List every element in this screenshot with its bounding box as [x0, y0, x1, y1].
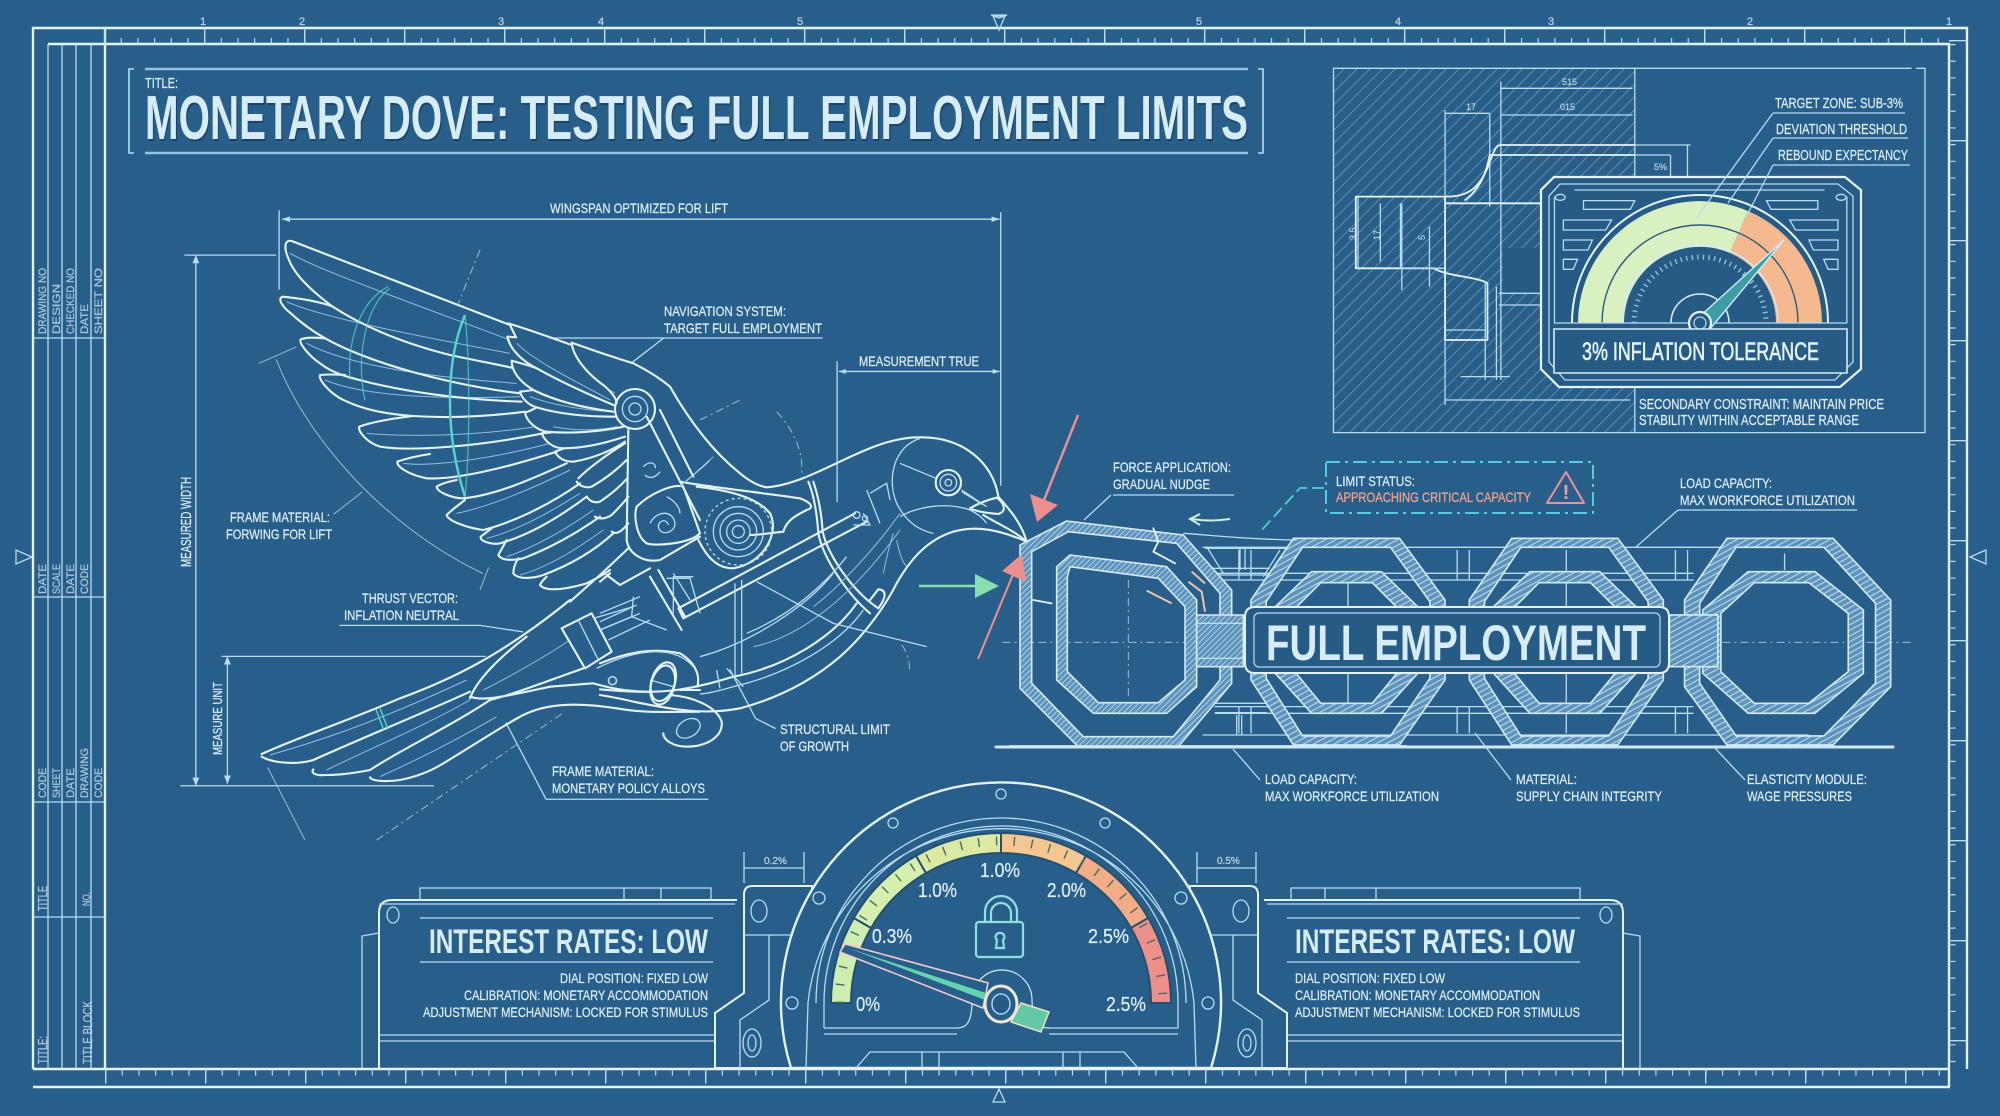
- gauge callouts: [1697, 95, 1910, 217]
- callout: force application: [1084, 459, 1234, 520]
- callout: elasticity: [1714, 747, 1867, 804]
- thrust note: [344, 590, 459, 623]
- hatched drawing: 17: [1466, 102, 1476, 112]
- dial values: 1.0%: [918, 880, 957, 902]
- drawing frame and rulers: 3: [498, 16, 504, 28]
- gauge callouts: TARGET ZONE: SUB-3%: [1775, 95, 1903, 112]
- wing frame note: [226, 509, 332, 542]
- dial side brackets: 0.5%: [1217, 856, 1240, 867]
- callout: elasticity: WAGE PRESSURES: [1747, 788, 1852, 804]
- dove dimension lines: [180, 210, 1001, 840]
- title block side strip: CODE: [93, 768, 105, 798]
- inflation banner: 3% INFLATION TOLERANCE: [1582, 338, 1819, 366]
- right rate heading: INTEREST RATES: LOW: [1295, 923, 1576, 961]
- structural limit note: [780, 721, 890, 754]
- title block side strip: DATE: [37, 564, 49, 594]
- hatched drawing: 5%: [1654, 162, 1667, 172]
- secondary constraint note: STABILITY WITHIN ACCEPTABLE RANGE: [1639, 412, 1859, 429]
- gauge plate: [1541, 177, 1861, 387]
- arrow: small return: [1190, 514, 1230, 525]
- dial values: 0.3%: [872, 926, 912, 948]
- right rate details: DIAL POSITION: FIXED LOW: [1295, 970, 1446, 986]
- callout: load capacity top: LOAD CAPACITY:: [1680, 475, 1772, 491]
- structural limit note: OF GROWTH: [780, 738, 849, 754]
- title small label: TITLE:: [145, 75, 178, 92]
- alloy note: [552, 763, 705, 796]
- dial values: 2.0%: [1047, 880, 1086, 902]
- hatched drawing: 5: [1417, 235, 1427, 240]
- callout: force application: GRADUAL NUDGE: [1113, 476, 1210, 492]
- inflation banner: [1554, 329, 1847, 373]
- secondary constraint note: [1639, 396, 1884, 429]
- panel: right interest rates: [1264, 888, 1640, 1068]
- dial values: [856, 860, 1146, 1016]
- callout: material: [1475, 733, 1663, 804]
- callout: load capacity top: [1636, 475, 1857, 547]
- callout: elasticity: ELASTICITY MODULE:: [1747, 771, 1867, 787]
- thrust note: INFLATION NEUTRAL: [344, 607, 459, 623]
- thrust note: THRUST VECTOR:: [362, 590, 458, 606]
- callout: load capacity top: MAX WORKFORCE UTILIZATION: [1680, 492, 1855, 508]
- callout: load capacity bottom: [1233, 749, 1439, 804]
- panel: inflation tolerance: [1333, 68, 1925, 433]
- right rate details: ADJUSTMENT MECHANISM: LOCKED FOR STIMULUS: [1295, 1004, 1580, 1020]
- callout: limit status: APPROACHING CRITICAL CAPACITY: [1336, 489, 1532, 505]
- dial bolts: [786, 789, 1214, 1009]
- alloy note: FRAME MATERIAL:: [552, 763, 654, 779]
- dial values: 1.0%: [980, 860, 1020, 882]
- drawing frame and rulers: 2: [299, 16, 305, 28]
- drawing frame and rulers: 4: [1395, 16, 1401, 28]
- title block side strip: CHECKED NO: [65, 268, 77, 334]
- teal wing arcs: [350, 250, 480, 497]
- mechanical joints: [615, 389, 927, 675]
- hatched drawing: 3.5: [1348, 227, 1358, 240]
- panel: title: [129, 69, 1263, 153]
- title block side strip: DATE: [79, 304, 91, 334]
- inflation gauge needle: [1689, 240, 1784, 334]
- left rate details: ADJUSTMENT MECHANISM: LOCKED FOR STIMULUS: [423, 1004, 708, 1020]
- right rate details: CALIBRATION: MONETARY ACCOMMODATION: [1295, 987, 1540, 1003]
- full employment structure: [996, 521, 1911, 747]
- fractured left octagon: [1010, 521, 1407, 747]
- panel: left interest rates: [362, 888, 737, 1068]
- title block side strip: TITLE: [35, 886, 50, 911]
- dimension labels: MEASUREMENT TRUE: [859, 353, 979, 369]
- drawing frame and rulers: 5: [1196, 16, 1202, 28]
- navigation note: [664, 303, 822, 336]
- alloy note: MONETARY POLICY ALLOYS: [552, 780, 705, 796]
- title block side strip: DATE: [65, 564, 77, 594]
- gauge callouts: REBOUND EXPECTANCY: [1778, 147, 1908, 164]
- inflation gauge arc: [1554, 195, 1847, 323]
- drawing frame and rulers: 1: [1946, 16, 1952, 28]
- title block side strip: SCALE: [51, 564, 63, 594]
- wing frame note: FORWING FOR LIFT: [226, 526, 332, 542]
- callout: load capacity bottom: MAX WORKFORCE UTILIZATION: [1265, 788, 1439, 804]
- head and eye: [753, 438, 1027, 647]
- callout: limit status: [1260, 462, 1593, 532]
- drawing frame and rulers: 3: [1548, 16, 1554, 28]
- navigation note: TARGET FULL EMPLOYMENT: [664, 320, 822, 336]
- title block side strip: TITLE:: [35, 1036, 50, 1064]
- dimension labels: MEASURE UNIT: [210, 682, 225, 755]
- dial side brackets: [715, 852, 1287, 1068]
- title block side strip: NO.: [81, 892, 93, 906]
- navigation note: NAVIGATION SYSTEM:: [664, 303, 786, 319]
- title block side strip: DRAWING: [79, 748, 91, 798]
- body and neck outline: [570, 387, 1027, 711]
- secondary constraint note: SECONDARY CONSTRAINT: MAINTAIN PRICE: [1639, 396, 1884, 413]
- title block side strip: SHEET: [51, 768, 63, 798]
- dial minor ticks: [839, 841, 1163, 1003]
- full employment banner: FULL EMPLOYMENT: [1266, 615, 1646, 671]
- hatched drawing: 515: [1562, 77, 1577, 87]
- dial values: 2.5%: [1088, 926, 1129, 948]
- callout: material: SUPPLY CHAIN INTEGRITY: [1516, 788, 1663, 804]
- lower body and foot: [600, 557, 847, 747]
- title block side strip: DESIGN: [51, 284, 63, 334]
- drawing frame and rulers: 2: [1747, 16, 1753, 28]
- arrow: lower red force: [978, 554, 1026, 659]
- left rate details: DIAL POSITION: FIXED LOW: [560, 970, 709, 986]
- drawing frame and rulers: 4: [598, 16, 604, 28]
- arrow: upper red force: [1030, 415, 1078, 522]
- panel: interest rate dial: [781, 782, 1221, 1068]
- title block side strip: TITLE BLOCK: [80, 1001, 95, 1064]
- wing feathers: [280, 241, 670, 589]
- icon: warning triangle: [1547, 472, 1584, 504]
- title block side strip: DATE: [65, 768, 77, 798]
- callout: force application: FORCE APPLICATION:: [1113, 459, 1231, 475]
- callout: load capacity bottom: LOAD CAPACITY:: [1265, 771, 1357, 787]
- title heading: MONETARY DOVE: TESTING FULL EMPLOYMENT LIMITS: [145, 84, 1248, 153]
- title block side strip: CODE: [37, 768, 49, 798]
- icon: padlock: [976, 896, 1023, 957]
- dial values: 2.5%: [1106, 994, 1146, 1016]
- callout: material: MATERIAL:: [1516, 771, 1577, 787]
- left rate details: CALIBRATION: MONETARY ACCOMMODATION: [464, 987, 708, 1003]
- left rate details: [423, 970, 709, 1020]
- dial scale arc: [831, 833, 1171, 1003]
- hatched drawing: 015: [1560, 102, 1575, 112]
- structural limit note: STRUCTURAL LIMIT: [780, 721, 890, 737]
- full employment banner: [1245, 607, 1669, 673]
- tail feathers: [262, 600, 700, 840]
- dial values: 0%: [856, 994, 880, 1016]
- dimension labels: WINGSPAN OPTIMIZED FOR LIFT: [550, 200, 728, 216]
- gauge callouts: DEVIATION THRESHOLD: [1776, 121, 1907, 138]
- dimension labels: [178, 200, 979, 755]
- dimension labels: MEASURED WIDTH: [178, 477, 195, 567]
- right rate details: [1295, 970, 1580, 1020]
- title block side strip: SHEET NO: [93, 267, 105, 334]
- wing frame note: FRAME MATERIAL:: [230, 509, 330, 525]
- drawing frame and rulers: 5: [797, 16, 803, 28]
- arrow: green nudge: [919, 574, 999, 598]
- hatched drawing: 17: [1372, 230, 1382, 240]
- title block side strip: [35, 267, 105, 1064]
- callout: limit status: LIMIT STATUS:: [1336, 473, 1415, 489]
- dove illustration: [262, 241, 1027, 840]
- dial needle: [840, 944, 1049, 1032]
- hatched drawing: [1333, 68, 1925, 433]
- icon: warning triangle: !: [1563, 482, 1569, 504]
- left rate heading: INTEREST RATES: LOW: [429, 923, 709, 961]
- title block side strip: CODE: [79, 564, 91, 594]
- dove annotations: [226, 303, 890, 796]
- title block side strip: DRAWING NO: [37, 268, 49, 334]
- dial side brackets: 0.2%: [764, 856, 787, 867]
- drawing frame and rulers: 1: [200, 16, 206, 28]
